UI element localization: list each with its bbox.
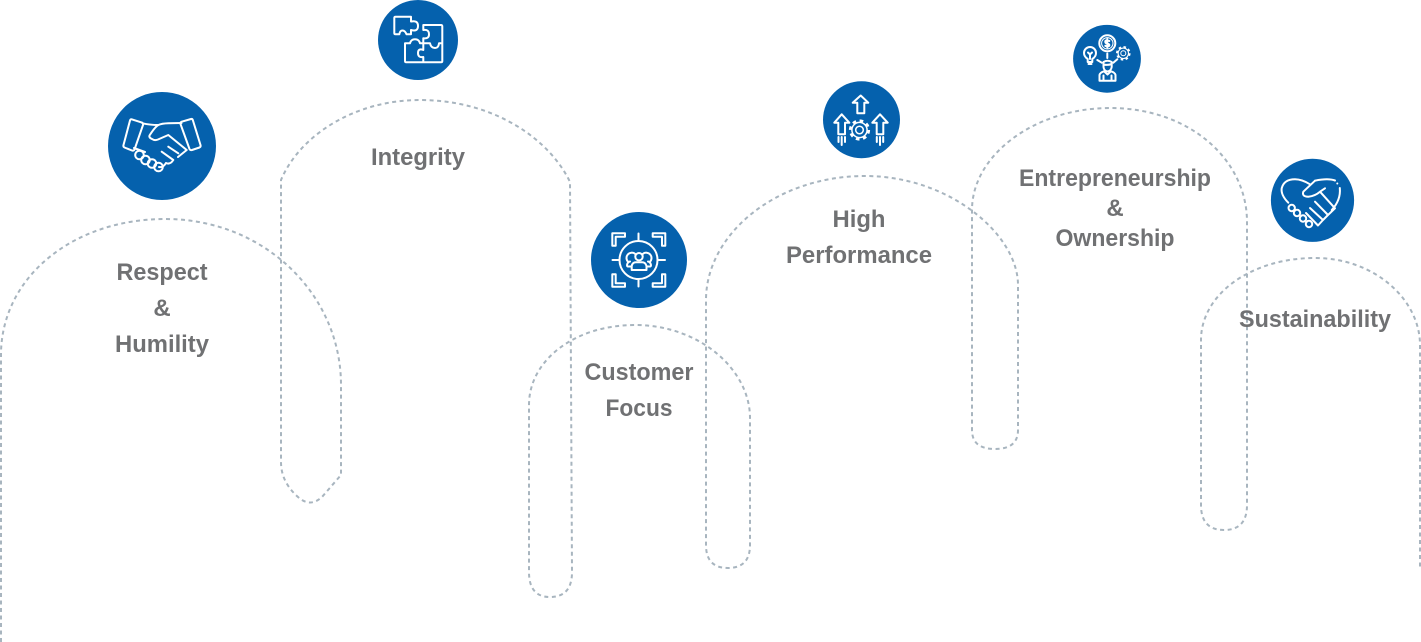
label: Customer Focus <box>584 359 694 422</box>
icon: entrepreneur with ideas <box>1073 25 1141 93</box>
label: Respect & Humility: & <box>153 295 171 322</box>
label: High Performance: Performance <box>786 242 932 269</box>
icon: customer target <box>591 212 687 308</box>
value: Entrepreneurship & Ownership <box>1019 25 1211 252</box>
value: Respect & Humility <box>108 92 216 358</box>
icon: arrows and gear <box>823 81 900 158</box>
label: Entrepreneurship & Ownership: & <box>1106 195 1124 222</box>
icon: puzzle pieces <box>378 0 458 80</box>
label: Integrity: Integrity <box>371 144 466 171</box>
value: Integrity <box>371 0 466 171</box>
icon: heart handshake <box>1271 159 1354 242</box>
label: Respect & Humility <box>115 259 210 358</box>
label: Respect & Humility: Respect <box>116 259 208 286</box>
value: High Performance <box>786 81 932 269</box>
label: Entrepreneurship & Ownership: Ownership <box>1056 225 1174 252</box>
value: Sustainability <box>1239 159 1392 333</box>
label: Customer Focus: Focus <box>606 395 672 422</box>
label: Respect & Humility: Humility <box>115 331 210 358</box>
label: Entrepreneurship & Ownership <box>1019 165 1211 252</box>
value: Customer Focus <box>584 212 694 422</box>
label: Entrepreneurship & Ownership: Entrepreneurship <box>1019 165 1211 192</box>
label: Sustainability: Sustainability <box>1239 306 1392 333</box>
label: High Performance: High <box>832 206 886 233</box>
label: High Performance <box>786 206 932 269</box>
label: Customer Focus: Customer <box>584 359 694 386</box>
icon: handshake <box>108 92 216 200</box>
